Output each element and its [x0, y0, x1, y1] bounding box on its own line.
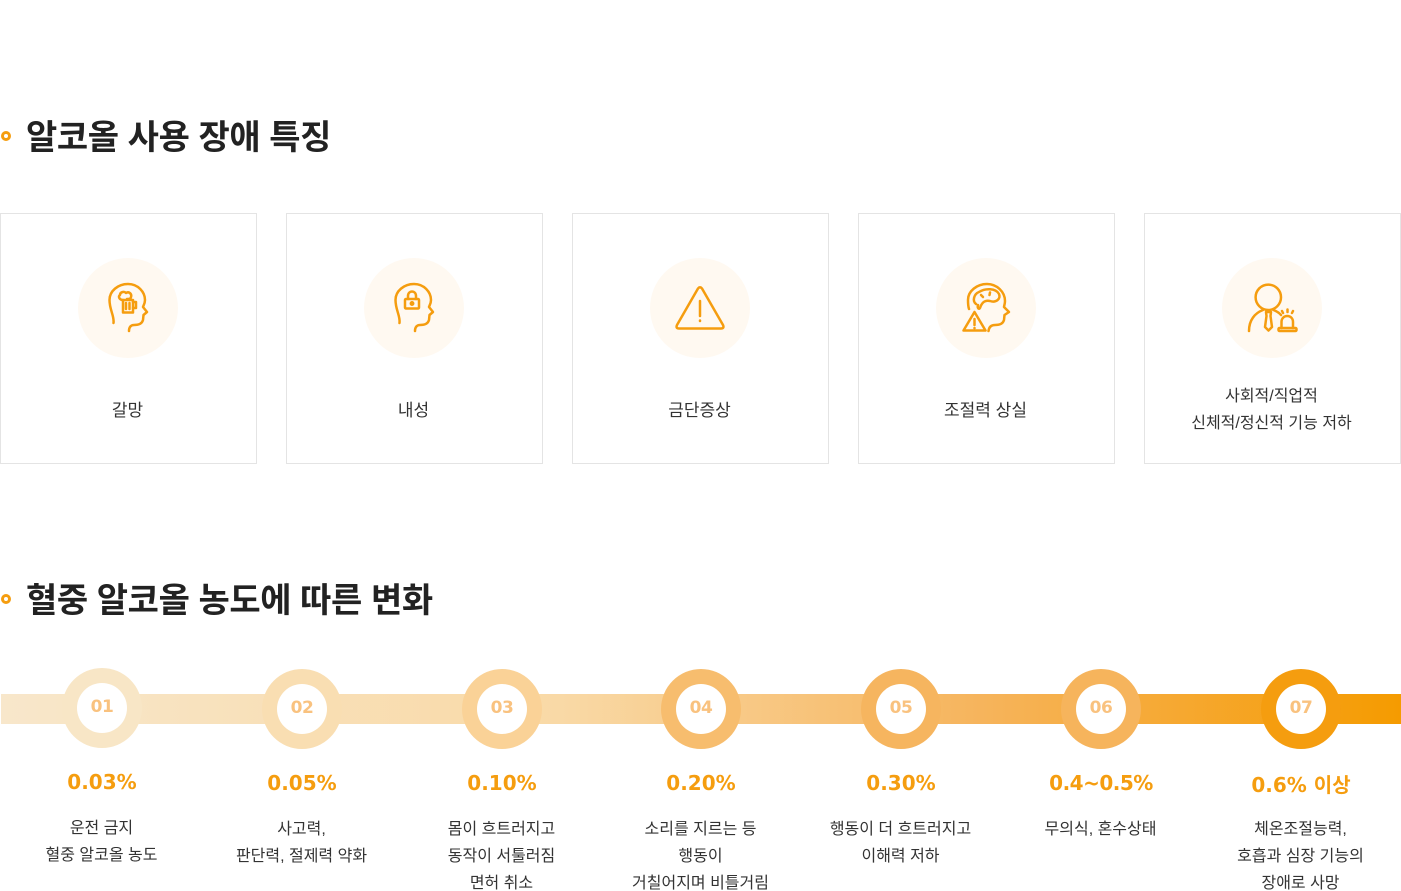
- value 03: 0.10%: [467, 771, 537, 795]
- description 06: 무의식, 혼수상태: [1045, 821, 1156, 838]
- panel: craving: [0, 213, 257, 464]
- description 01: 운전 금지: [70, 820, 133, 837]
- panel: tolerance: [286, 213, 543, 464]
- value 04: 0.20%: [666, 771, 736, 795]
- icon: warning triangle: [650, 258, 750, 358]
- marker 05: [861, 669, 941, 749]
- panel: loss of control: [858, 213, 1115, 464]
- step 02: [236, 669, 367, 865]
- description 05: 이해력 저하: [861, 848, 940, 865]
- marker 06: [1061, 669, 1141, 749]
- bullet: section 1: [1, 131, 11, 141]
- icon: head with beer: [78, 258, 178, 358]
- step 07: [1237, 669, 1364, 891]
- label: 신체적/정신적 기능 저하: [1191, 415, 1352, 432]
- description 05: [830, 820, 971, 865]
- description 05: 행동이 더 흐트러지고: [830, 821, 971, 838]
- step 01: [46, 668, 157, 864]
- label: 조절력 상실: [944, 401, 1027, 420]
- description 03: 몸이 흐트러지고: [448, 821, 555, 838]
- step 04: [632, 669, 769, 891]
- description 02: 사고력,: [277, 821, 326, 838]
- panel: withdrawal: [572, 213, 829, 464]
- value 01: 0.03%: [67, 770, 137, 794]
- marker 01: 01: [91, 697, 113, 717]
- description 01: [46, 820, 157, 864]
- label: 갈망: [112, 401, 143, 420]
- step 06: [1045, 669, 1156, 838]
- marker 03: [462, 669, 542, 749]
- gradient timeline bar: [1, 694, 1401, 724]
- marker 02: [262, 669, 342, 749]
- step 03: [448, 669, 555, 891]
- label: 금단증상: [668, 401, 731, 420]
- description 04: 소리를 지르는 등: [645, 821, 756, 838]
- marker 07: [1261, 669, 1341, 749]
- description 07: 체온조절능력,: [1254, 821, 1347, 838]
- step 05: [830, 669, 971, 865]
- panel: functional decline: [1144, 213, 1401, 464]
- description 04: 행동이: [678, 848, 723, 865]
- heading: section 2: 혈중 알코올 농도에 따른 변화: [26, 582, 433, 620]
- description 04: [632, 820, 769, 891]
- marker 01: [62, 668, 142, 748]
- heading: section 1: 알코올 사용 장애 특징: [26, 119, 331, 157]
- icon: head with lock: [364, 258, 464, 358]
- label: 내성: [398, 401, 429, 420]
- description 07: 호흡과 심장 기능의: [1237, 848, 1364, 865]
- bullet: section 2: [1, 594, 11, 604]
- description 03: 동작이 서툴러짐: [448, 848, 555, 865]
- description 02: 판단력, 절제력 약화: [236, 848, 367, 865]
- description 07: [1237, 820, 1364, 891]
- icon: head with brain and warning: [936, 258, 1036, 358]
- marker 05: 05: [890, 698, 912, 718]
- label: 사회적/직업적: [1225, 388, 1318, 405]
- marker 04: 04: [690, 698, 712, 718]
- label: [1191, 388, 1352, 432]
- value 05: 0.30%: [866, 771, 936, 795]
- marker 07: 07: [1290, 698, 1312, 718]
- marker 06: 06: [1090, 698, 1112, 718]
- value 02: 0.05%: [267, 771, 337, 795]
- value 07: 0.6% 이상: [1251, 773, 1351, 797]
- marker 04: [661, 669, 741, 749]
- description 02: [236, 820, 367, 865]
- marker 02: 02: [291, 698, 313, 718]
- icon: person with alarm bell: [1222, 258, 1322, 358]
- description 01: 혈중 알코올 농도: [46, 847, 157, 864]
- description 03: [448, 820, 555, 891]
- marker 03: 03: [491, 698, 513, 718]
- value 06: 0.4~0.5%: [1049, 771, 1153, 795]
